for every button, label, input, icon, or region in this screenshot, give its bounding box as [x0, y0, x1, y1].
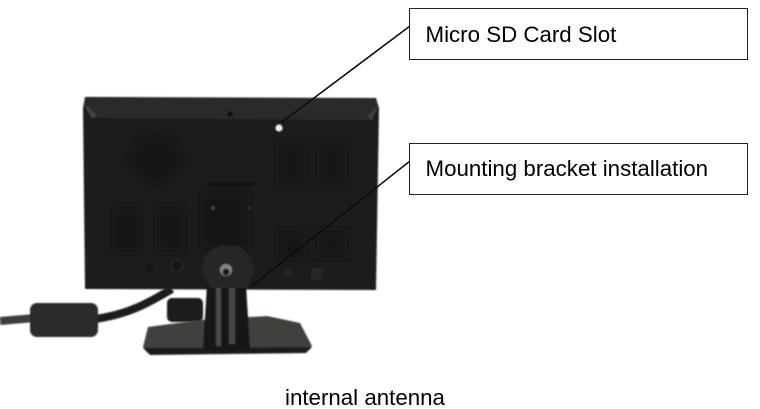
leader line: micro sd: [282, 26, 410, 122]
monitor body: [83, 97, 379, 290]
label: micro sd card slot: Micro SD Card Slot: [426, 22, 616, 47]
leader line: mounting bracket: [252, 161, 410, 286]
cable and ferrite: [0, 289, 203, 337]
monitor ports: [144, 112, 323, 280]
monitor recesses: [114, 134, 345, 258]
stand arm: [202, 245, 255, 350]
label: mounting bracket installation: Mounting bracket installation: [426, 156, 708, 181]
label: micro sd card slot: [409, 8, 748, 60]
white sd slot dot: [275, 124, 283, 132]
label: mounting bracket installation: [409, 143, 748, 195]
stand base: [143, 316, 312, 355]
